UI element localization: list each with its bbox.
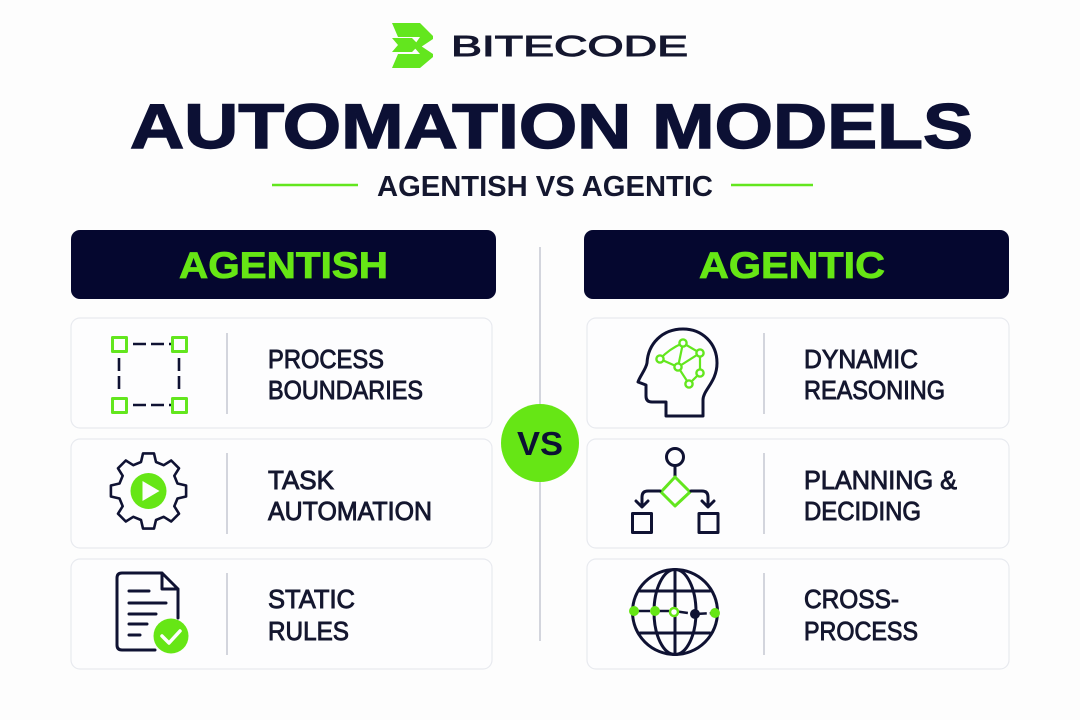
logo: Bitecode [392,23,688,68]
panel: dynamic reasoning [587,318,1009,428]
label: task automation [268,465,432,526]
label: planning and deciding: DECIDING [804,496,921,526]
label: process boundaries: PROCESS [268,344,384,374]
icon: gear with play button [111,453,186,529]
icon: dashed boundary square [112,338,186,412]
subtitle with side rules: AGENTISH VS AGENTIC [377,171,713,203]
panel: process boundaries [71,318,492,428]
label: dynamic reasoning: REASONING [804,375,945,405]
label: planning and deciding: PLANNING & [804,465,957,495]
logo: Bitecode: BITECODE [451,31,688,63]
label: static rules: RULES [268,616,349,646]
panel: planning and deciding [587,439,1009,548]
label: dynamic reasoning: DYNAMIC [804,344,918,374]
VS badge [501,404,579,482]
label: cross-process [804,584,918,646]
panel: static rules [71,559,492,669]
label: process boundaries: BOUNDARIES [268,375,423,405]
label: static rules [268,584,355,646]
label: task automation: TASK [268,465,335,495]
panel: task automation [71,439,492,548]
title: AUTOMATION MODELS [130,92,973,162]
label: cross-process: CROSS- [804,584,899,614]
icon: globe with nodes [629,570,720,654]
icon: head with network [638,329,717,416]
heading: Agentish [71,230,496,299]
heading: Agentic: AGENTIC [699,245,885,286]
VS badge: VS [517,425,563,462]
icon: document with check [117,573,188,654]
panel: cross-process [587,559,1009,669]
label: static rules: STATIC [268,584,355,614]
heading: Agentish: AGENTISH [179,245,388,286]
icon: decision flowchart [632,448,718,532]
label: cross-process: PROCESS [804,616,918,646]
heading: Agentic [584,230,1009,299]
label: planning and deciding [804,465,957,526]
label: dynamic reasoning [804,344,945,405]
center divider [539,247,541,641]
label: process boundaries [268,344,423,405]
label: task automation: AUTOMATION [268,496,432,526]
